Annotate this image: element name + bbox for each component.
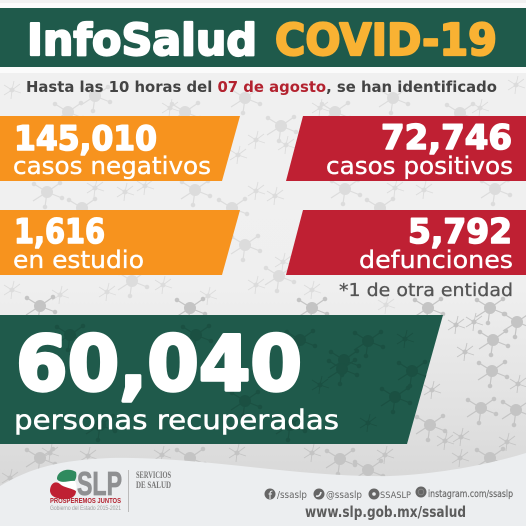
label: casos negativos: casos negativos xyxy=(13,152,211,180)
upper background molecule pattern xyxy=(4,76,525,314)
panel: casos positivos xyxy=(286,116,526,181)
label: casos positivos: casos positivos xyxy=(326,152,513,180)
handle: twitter: @ssaslp xyxy=(326,490,362,501)
label: personas recuperadas: personas recuperadas xyxy=(14,405,339,436)
icon: facebook xyxy=(264,488,276,500)
icon: logo emblem xyxy=(50,470,77,499)
label: en estudio: en estudio xyxy=(13,246,144,274)
panel: en estudio xyxy=(0,210,240,275)
social media row xyxy=(264,486,513,501)
handle: youtube: SSASLP xyxy=(380,491,412,501)
title: COVID-19: COVID-19 xyxy=(275,15,497,66)
title: InfoSalud: InfoSalud xyxy=(27,15,257,66)
logo: SLP xyxy=(50,465,122,512)
number: casos negativos: 145,010 xyxy=(14,119,157,159)
panel: defunciones xyxy=(286,210,526,275)
number: recuperadas: 60,040 xyxy=(16,319,302,408)
number: en estudio: 1,616 xyxy=(14,212,105,252)
panel: personas recuperadas xyxy=(0,315,443,444)
icon: instagram xyxy=(416,486,426,498)
label: defunciones: defunciones xyxy=(359,246,513,274)
footer curved band xyxy=(0,453,526,526)
subtitle: Hasta las 10 horas del 07 de agosto, se han identificado xyxy=(26,78,497,96)
handle: facebook: /ssaslp xyxy=(277,490,307,501)
text: Servicios de Salud xyxy=(136,470,171,490)
header band xyxy=(0,8,526,67)
text: Servicios de Salud: SERVICIOS xyxy=(136,470,171,480)
icon: youtube xyxy=(368,488,380,500)
website: www.slp.gob.mx/ssalud xyxy=(305,503,466,521)
logo slogan: PROSPEREMOS JUNTOS xyxy=(50,496,121,505)
top white strip xyxy=(0,3,526,8)
panel molecule pattern xyxy=(55,324,429,442)
lower background molecule pattern xyxy=(2,295,526,487)
logo wordmark: SLP xyxy=(77,465,122,502)
panel: casos negativos xyxy=(0,116,240,181)
white strip below header xyxy=(0,67,526,73)
number: casos positivos: 72,746 xyxy=(381,118,512,158)
number: defunciones: 5,792 xyxy=(408,212,512,252)
logo caption: Gobierno del Estado 2015-2021 xyxy=(50,506,122,512)
footnote: *1 de otra entidad xyxy=(339,280,513,301)
icon: twitter xyxy=(314,488,324,500)
text: Servicios de Salud: DE SALUD xyxy=(136,480,171,490)
